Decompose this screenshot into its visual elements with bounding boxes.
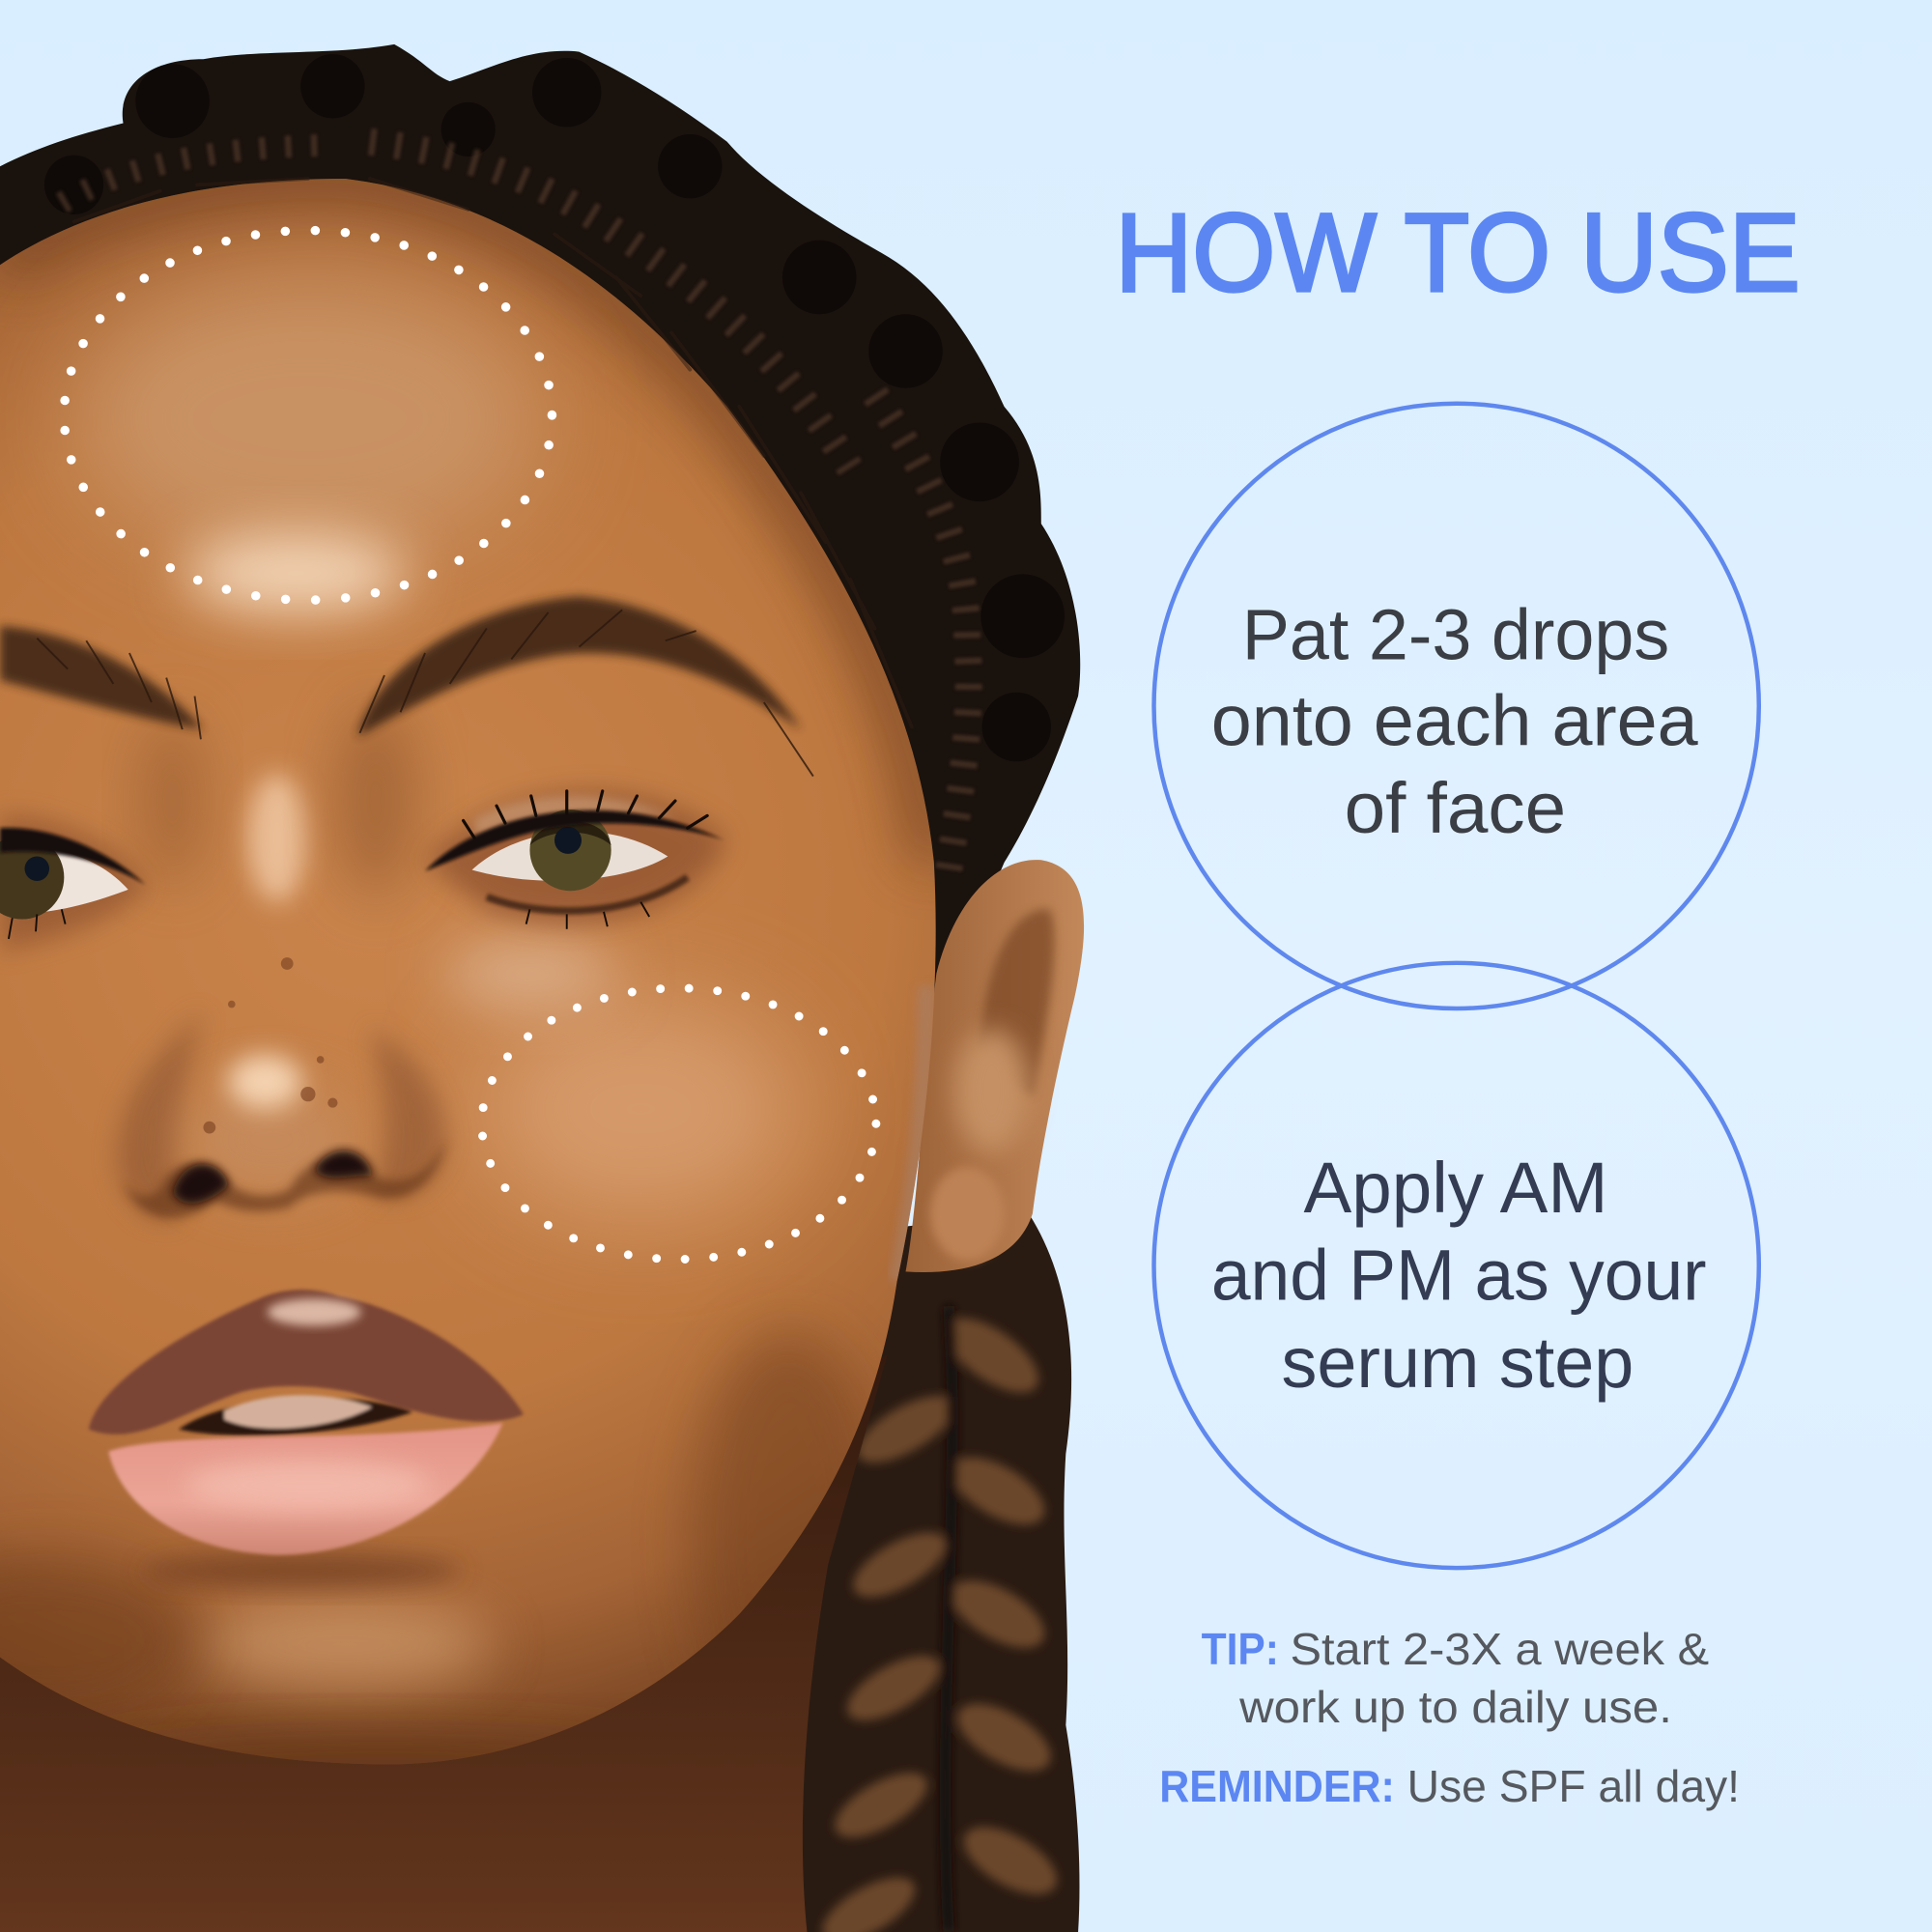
eye socket shadows [334, 702, 417, 899]
step 2 text [1211, 1148, 1707, 1403]
ear [906, 860, 1084, 1272]
step 1 text [1211, 594, 1699, 848]
right eyebrow [357, 596, 813, 777]
pale cheek edge [897, 985, 926, 1282]
reminder text: Use SPF all day! [1407, 1761, 1740, 1811]
cheek glow [480, 998, 801, 1220]
reminder text: REMINDER: [1159, 1761, 1395, 1811]
step 1 text: of face [1345, 768, 1566, 848]
face skin [0, 179, 936, 1764]
tip text [1202, 1624, 1709, 1732]
dotted circle: cheek area [482, 988, 876, 1260]
chin light [197, 1602, 493, 1688]
under-eye highlight [443, 936, 616, 1010]
lower jaw shade [674, 1317, 873, 1638]
step 2 text: serum step [1282, 1322, 1634, 1403]
step 1 text: Pat 2-3 drops [1242, 594, 1669, 674]
braid texture [44, 54, 1065, 761]
freckles [203, 957, 337, 1133]
dotted circle: forehead area [64, 231, 552, 600]
step 2 text: and PM as your [1211, 1236, 1707, 1316]
nose [117, 1010, 446, 1221]
step circle 1 [1154, 404, 1759, 1009]
hair silhouette [0, 44, 1080, 1932]
hairline shadow [0, 179, 934, 863]
wispy hairline [74, 179, 912, 727]
tip text: TIP: [1202, 1624, 1279, 1674]
tip text: Start 2-3X a week & [1290, 1624, 1709, 1674]
step circle 2 [1154, 963, 1759, 1568]
reminder text [1159, 1761, 1740, 1811]
tip text: work up to daily use. [1238, 1682, 1672, 1732]
braid strands [62, 142, 969, 887]
title: HOW TO USE [1115, 191, 1801, 315]
left eye [0, 815, 148, 952]
right eye [425, 791, 727, 929]
step 1 text: onto each area [1211, 681, 1699, 761]
portrait photo of model [0, 0, 1084, 1932]
forehead glow [74, 277, 542, 560]
step 2 text: Apply AM [1303, 1148, 1608, 1228]
neck [0, 1355, 887, 1932]
lower braid pattern [812, 1304, 1067, 1932]
nose bridge highlight [247, 774, 307, 902]
lips [89, 1290, 524, 1588]
left eyebrow [0, 626, 203, 739]
